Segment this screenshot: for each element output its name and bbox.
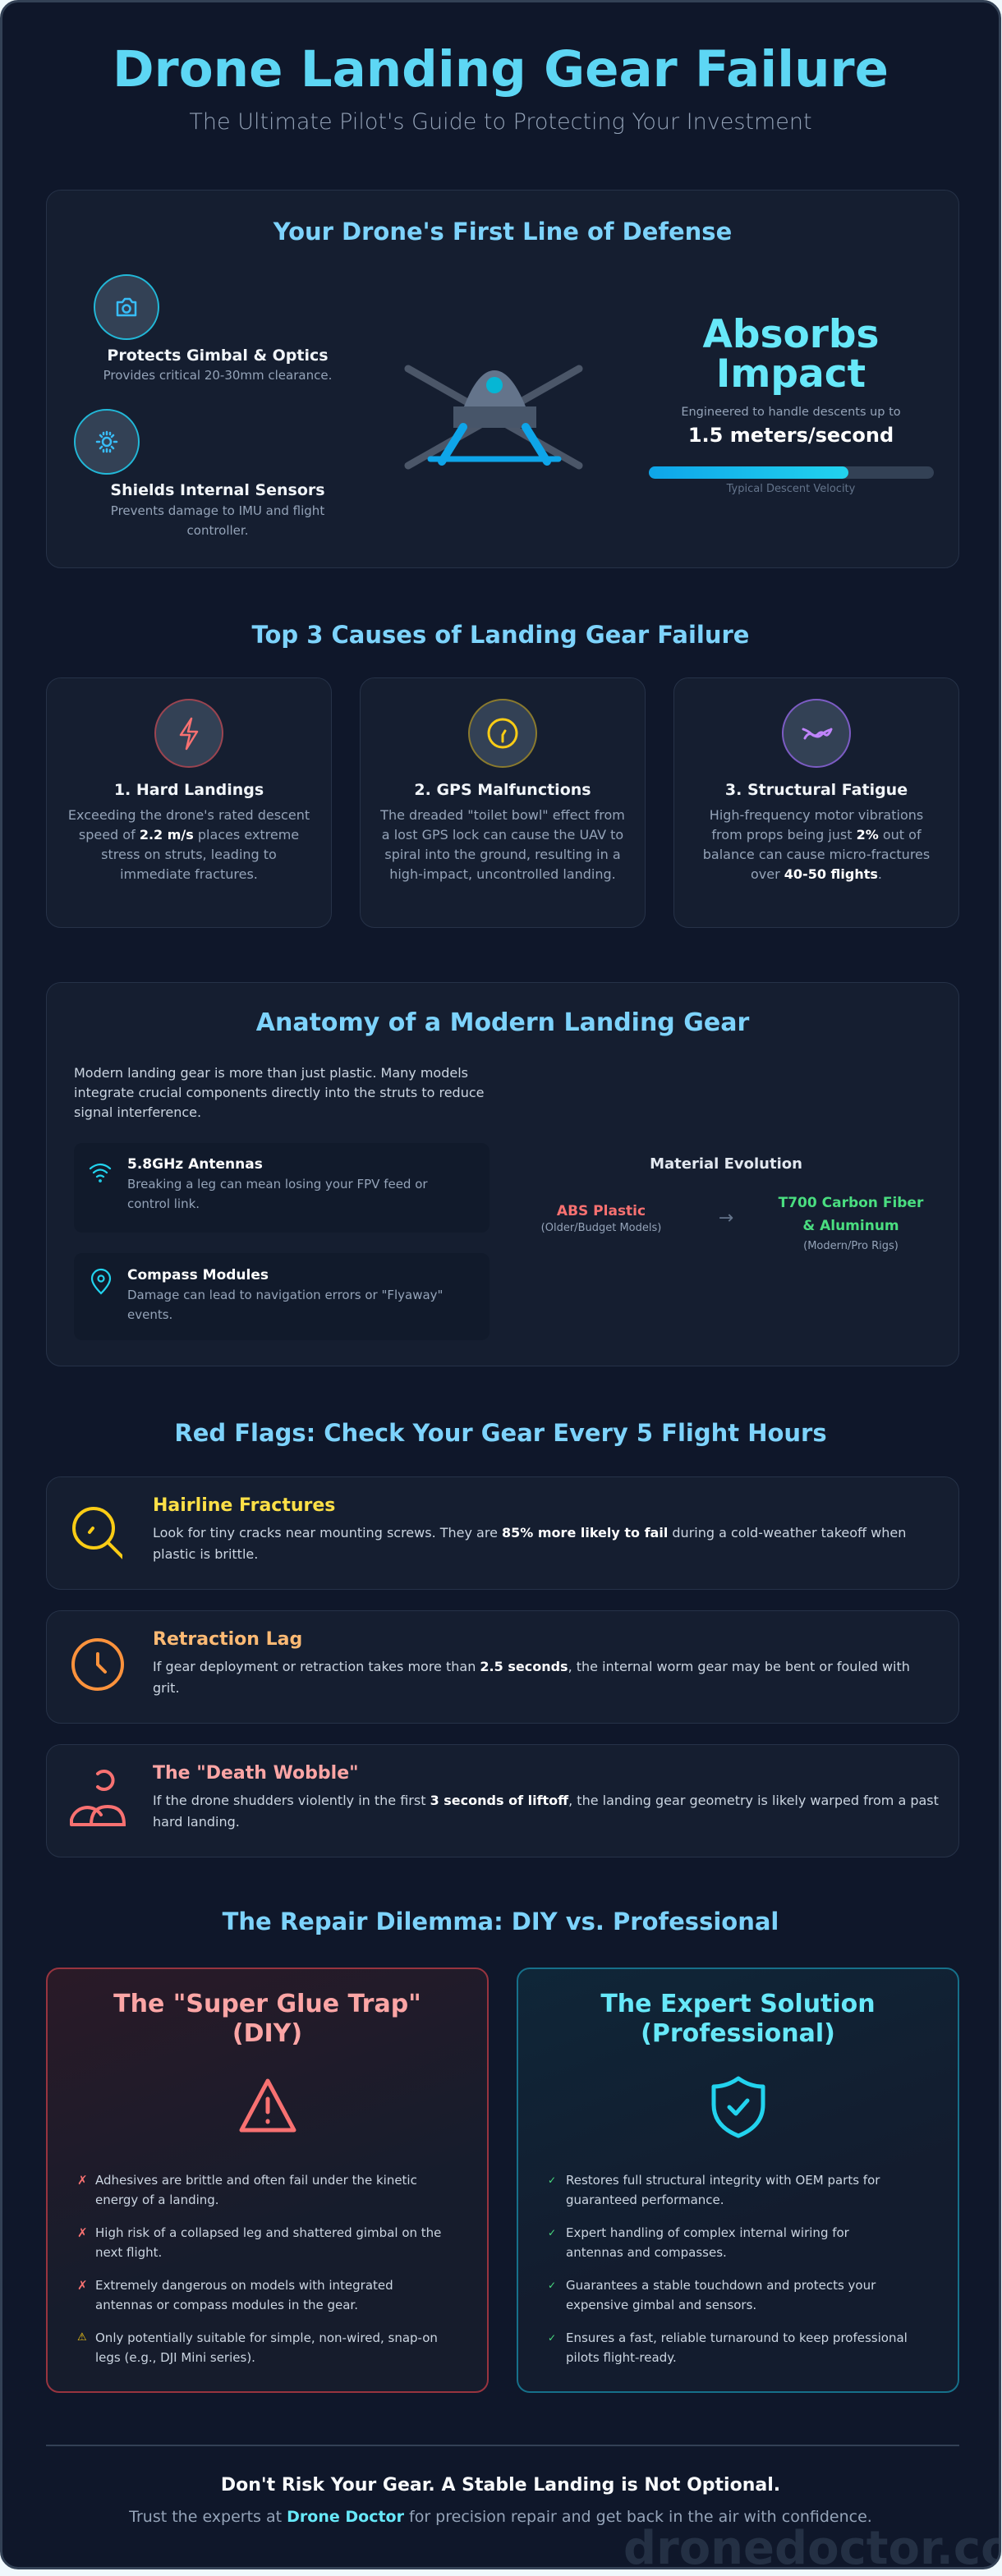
heading: pro: The Expert Solution (600, 1990, 876, 2018)
icon: vibration (782, 699, 851, 768)
list: diy risks: Only potentially suitable for simple, non-wired, snap-on legs (e.g., DJI Mini series). (95, 2330, 438, 2365)
title: Drone Landing Gear Failure (113, 40, 889, 99)
icon: sensor (74, 409, 140, 475)
stat: absorbs impact: 1.5 meters/second (688, 424, 894, 447)
subcard: antennas (74, 1143, 490, 1233)
card: retraction lag (46, 1610, 959, 1724)
icon: warning (240, 2079, 296, 2132)
heading: red flags: Red Flags: Check Your Gear Every 5 Flight Hours (174, 1419, 827, 1447)
bar: descent velocity (649, 466, 934, 479)
text: hairline (153, 1495, 906, 1562)
panel: anatomy (46, 982, 959, 1366)
material: carbon: T700 Carbon Fiber (779, 1195, 923, 1211)
list: diy risks: Extremely dangerous on models with integrated antennas or compass modules in the gear. (95, 2278, 393, 2312)
heading: pro: (Professional) (641, 2019, 835, 2048)
text: gps: The dreaded "toilet bowl" effect from a lost GPS lock can cause the UAV to spiral into the ground, resulting in a high-impact, uncontrolled landing. (380, 807, 625, 882)
text: retraction: Retraction Lag (153, 1629, 302, 1650)
text: hairline: Look for tiny cracks near mounting screws. They are 85% more likely to fail during a cold-weather takeoff when plastic is brittle. (153, 1525, 906, 1562)
text: protects gimbal: Protects Gimbal & Optics (107, 347, 329, 365)
panel: first line of defense (46, 190, 959, 568)
material: abs: (Older/Budget Models) (541, 1222, 661, 1234)
icon: lightning (154, 699, 223, 768)
text: shields sensors (110, 481, 325, 538)
subcard: compass (74, 1253, 490, 1340)
list: pro benefits (548, 2173, 908, 2365)
heading: material evolution: Material Evolution (650, 1155, 802, 1173)
panel: diy (46, 1968, 489, 2393)
footer: tagline: Trust the experts at Drone Doctor for precision repair and get back in the air with confidence. (129, 2508, 872, 2526)
text: fatigue: 3. Structural Fatigue (725, 781, 908, 799)
arrow: → (719, 1208, 733, 1228)
card: death wobble (46, 1744, 959, 1857)
text: compass: Damage can lead to navigation errors or "Flyaway" events. (127, 1288, 443, 1322)
text: gps: 2. GPS Malfunctions (414, 781, 591, 799)
list: pro benefits: ✓ (548, 2174, 556, 2186)
text: protects gimbal: Provides critical 20-30mm clearance. (103, 368, 332, 383)
caption: velocity: Typical Descent Velocity (727, 483, 855, 495)
heading: diy: The "Super Glue Trap" (113, 1990, 421, 2018)
list: diy risks: High risk of a collapsed leg and shattered gimbal on the next flight. (95, 2225, 441, 2260)
list: diy risks (77, 2173, 441, 2365)
stat: absorbs impact: Impact (716, 351, 866, 397)
heading: causes: Top 3 Causes of Landing Gear Failure (252, 621, 749, 649)
text: wobble: If the drone shudders violently in the first 3 seconds of liftoff, the landing gear geometry is likely warped from a past hard landing. (153, 1793, 939, 1830)
list: pro benefits: Expert handling of complex internal wiring for antennas and compasses. (566, 2225, 849, 2260)
panel: professional (517, 1968, 959, 2393)
text: hard landings: 1. Hard Landings (114, 781, 264, 799)
material: carbon (779, 1195, 923, 1252)
text: retraction (153, 1629, 910, 1696)
list: diy risks: ✗ (77, 2225, 88, 2240)
footer: headline: Don't Risk Your Gear. A Stable Landing is Not Optional. (221, 2475, 780, 2496)
material: abs (541, 1203, 661, 1234)
text: antennas (127, 1156, 428, 1211)
list: pro benefits: ✓ (548, 2227, 556, 2239)
text: fatigue: High-frequency motor vibrations from props being just 2% out of balance can cause micro-fractures over 40-50 flights. (703, 807, 930, 882)
card: fatigue (673, 677, 959, 928)
stat: absorbs impact (681, 312, 901, 447)
heading: anatomy: Anatomy of a Modern Landing Gear (256, 1008, 749, 1037)
text: shields sensors: controller. (187, 523, 248, 538)
icon: clock (71, 1638, 124, 1691)
text: hairline: Hairline Fractures (153, 1495, 335, 1516)
heading: pro (600, 1990, 876, 2048)
list: diy risks: ✗ (77, 2278, 88, 2293)
icon: wobble (70, 1770, 126, 1826)
text: shields sensors: Prevents damage to IMU and flight (111, 503, 324, 518)
heading: diy: (DIY) (232, 2019, 302, 2048)
text: wobble: The "Death Wobble" (153, 1763, 359, 1784)
drone illustration (404, 365, 583, 470)
material: carbon: (Modern/Pro Rigs) (803, 1240, 899, 1252)
material: abs: ABS Plastic (557, 1203, 646, 1219)
text: hard landings: Exceeding the drone's rated descent speed of 2.2 m/s places extreme stress on struts, leading to immediate fractures. (68, 807, 310, 882)
text: protects gimbal (103, 347, 332, 383)
text: retraction: If gear deployment or retraction takes more than 2.5 seconds, the internal worm gear may be bent or fouled with grit. (153, 1659, 910, 1696)
card: hard landings (46, 677, 332, 928)
text: compass: Compass Modules (127, 1267, 269, 1283)
text: shields sensors: Shields Internal Sensors (110, 481, 325, 499)
text: compass (127, 1267, 443, 1322)
list: pro benefits: Restores full structural integrity with OEM parts for guaranteed performance. (566, 2173, 880, 2207)
heading: diy (113, 1990, 421, 2048)
card: gps (360, 677, 646, 928)
heading: repair dilemma: The Repair Dilemma: DIY vs. Professional (223, 1908, 779, 1935)
icon: pin (90, 1268, 112, 1294)
text: antennas: Breaking a leg can mean losing your FPV feed or control link. (127, 1177, 428, 1211)
text: antennas: 5.8GHz Antennas (127, 1156, 263, 1173)
text: wobble (153, 1763, 939, 1830)
icon: gauge (468, 699, 537, 768)
stat: absorbs impact: Absorbs (702, 312, 880, 357)
list: pro benefits: Ensures a fast, reliable turnaround to keep professional pilots flight-ready. (566, 2330, 908, 2365)
heading: defense: Your Drone's First Line of Defense (273, 218, 732, 246)
icon: magnifier (72, 1507, 122, 1559)
list: pro benefits: ✓ (548, 2332, 556, 2344)
icon: wifi (89, 1163, 112, 1182)
subtitle: The Ultimate Pilot's Guide to Protecting Your Investment (189, 109, 812, 135)
stat: absorbs impact: Engineered to handle descents up to (681, 406, 901, 419)
text: intro: Modern landing gear is more than just plastic. Many models integrate crucial components directly into the struts to reduce signal interference. (74, 1065, 484, 1120)
list: pro benefits: ✓ (548, 2280, 556, 2291)
icon: camera (94, 274, 159, 340)
list: pro benefits: Guarantees a stable touchdown and protects your expensive gimbal and sensors. (566, 2278, 876, 2312)
material: carbon: & Aluminum (802, 1218, 899, 1234)
icon: shield (711, 2076, 765, 2138)
list: diy risks: ✗ (77, 2173, 88, 2188)
list: diy risks: ⚠ (77, 2331, 87, 2344)
card: hairline fractures (46, 1476, 959, 1590)
list: diy risks: Adhesives are brittle and often fail under the kinetic energy of a landing. (95, 2173, 417, 2207)
